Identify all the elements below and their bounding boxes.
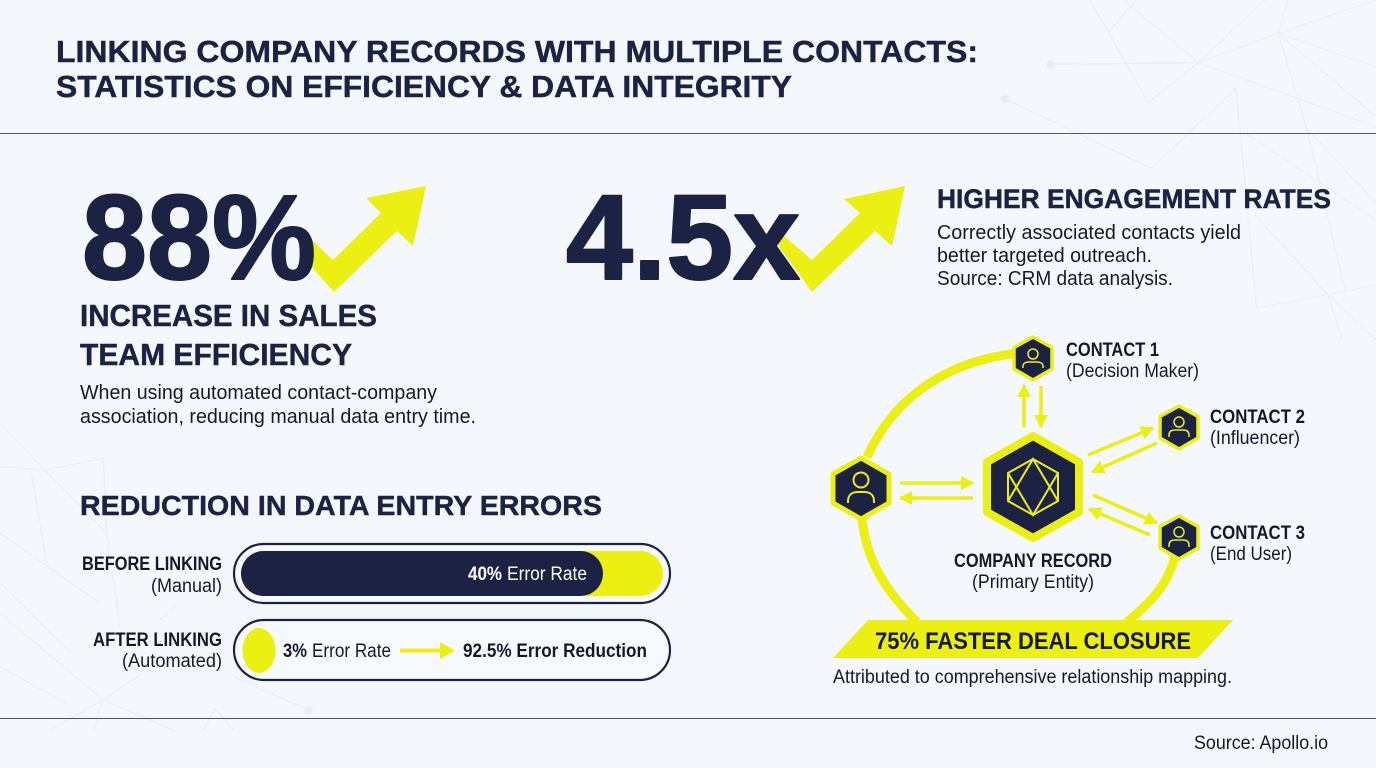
stat: 4.5x: 4.5x bbox=[566, 169, 800, 305]
label: contact 2 bbox=[1210, 407, 1305, 449]
icon: left contact hexagon bbox=[833, 458, 889, 519]
heading: reduction in data entry errors: REDUCTION IN DATA ENTRY ERRORS bbox=[80, 490, 602, 521]
label: contact 1 bbox=[1066, 340, 1199, 382]
label: contact 3: (End User) bbox=[1210, 544, 1292, 565]
banner: 75% faster deal closure bbox=[833, 620, 1233, 658]
label: company record: COMPANY RECORD bbox=[954, 551, 1112, 572]
panel: 4.5x engagement stat bbox=[566, 169, 1331, 305]
title: STATISTICS ON EFFICIENCY & DATA INTEGRITY bbox=[56, 69, 792, 104]
text: engagement description: better targeted outreach. bbox=[937, 245, 1152, 267]
label: before linking: BEFORE LINKING bbox=[82, 554, 222, 575]
label: contact 1: (Decision Maker) bbox=[1066, 361, 1199, 382]
label: company record: (Primary Entity) bbox=[972, 572, 1094, 593]
heading: increase in sales team efficiency: INCREASE IN SALES bbox=[80, 298, 377, 333]
panel: reduction in data entry errors bbox=[80, 490, 670, 680]
bar: after linking 3%: 92.5% Error Reduction bbox=[463, 641, 647, 662]
label: before linking bbox=[82, 554, 222, 597]
heading: increase in sales team efficiency bbox=[80, 298, 377, 372]
label: contact 3 bbox=[1210, 523, 1305, 565]
title: LINKING COMPANY RECORDS WITH MULTIPLE CONTACTS: bbox=[56, 34, 978, 69]
label: after linking bbox=[93, 630, 222, 672]
text: engagement description: Source: CRM data analysis. bbox=[937, 268, 1173, 290]
source footer: Source: Apollo.io bbox=[1194, 733, 1328, 754]
label: after linking: AFTER LINKING bbox=[93, 630, 222, 651]
text: efficiency description: association, reducing manual data entry time. bbox=[80, 406, 476, 428]
arrow: to error reduction bbox=[400, 642, 455, 659]
text: efficiency description: When using automated contact-company bbox=[80, 382, 437, 404]
bar: after linking 3%: 3% bbox=[283, 641, 307, 662]
label: contact 3: CONTACT 3 bbox=[1210, 523, 1305, 544]
arc connecting contacts bbox=[862, 353, 1175, 622]
label: contact 2: (Influencer) bbox=[1210, 428, 1300, 449]
label: after linking: (Automated) bbox=[122, 651, 222, 672]
text: engagement description bbox=[937, 222, 1241, 290]
heading: higher engagement rates: HIGHER ENGAGEMENT RATES bbox=[937, 184, 1331, 214]
bar: before linking 40%: Error Rate bbox=[507, 564, 587, 585]
arrows: contact 1 and company bbox=[1024, 385, 1041, 427]
icon: contact 1 hexagon bbox=[1014, 337, 1052, 380]
label: company record bbox=[954, 551, 1112, 593]
title bbox=[56, 34, 978, 104]
arrows: left contact and company bbox=[900, 483, 973, 498]
banner: 75% faster deal closure: 75% FASTER DEAL CLOSURE bbox=[875, 628, 1191, 655]
panel: 88% efficiency stat bbox=[80, 169, 476, 428]
bar: before linking 40% bbox=[234, 544, 670, 603]
arrows: contact 3 and company bbox=[1089, 495, 1157, 535]
text: attribution: Attributed to comprehensive relationship mapping. bbox=[833, 667, 1232, 688]
icon: contact 3 hexagon bbox=[1160, 516, 1198, 559]
heading: increase in sales team efficiency: TEAM EFFICIENCY bbox=[80, 337, 352, 372]
panel: company record network diagram bbox=[833, 337, 1305, 688]
icon: yellow up arrow bbox=[302, 186, 426, 292]
bar: after linking 3% bbox=[234, 620, 670, 680]
label: contact 2: CONTACT 2 bbox=[1210, 407, 1305, 428]
text: efficiency description bbox=[80, 382, 476, 428]
text: engagement description: Correctly associated contacts yield bbox=[937, 222, 1241, 244]
label: contact 1: CONTACT 1 bbox=[1066, 340, 1159, 361]
icon: contact 2 hexagon bbox=[1160, 406, 1198, 449]
icon: yellow up arrow bbox=[778, 186, 905, 292]
label: before linking: (Manual) bbox=[151, 576, 222, 597]
arrows: contact 2 and company bbox=[1088, 428, 1157, 472]
icon: company hexagon bbox=[987, 436, 1079, 538]
stat: 88%: 88% bbox=[82, 169, 316, 305]
bar: after linking 3%: Error Rate bbox=[312, 641, 391, 662]
bar: before linking 40%: 40% bbox=[468, 564, 502, 585]
